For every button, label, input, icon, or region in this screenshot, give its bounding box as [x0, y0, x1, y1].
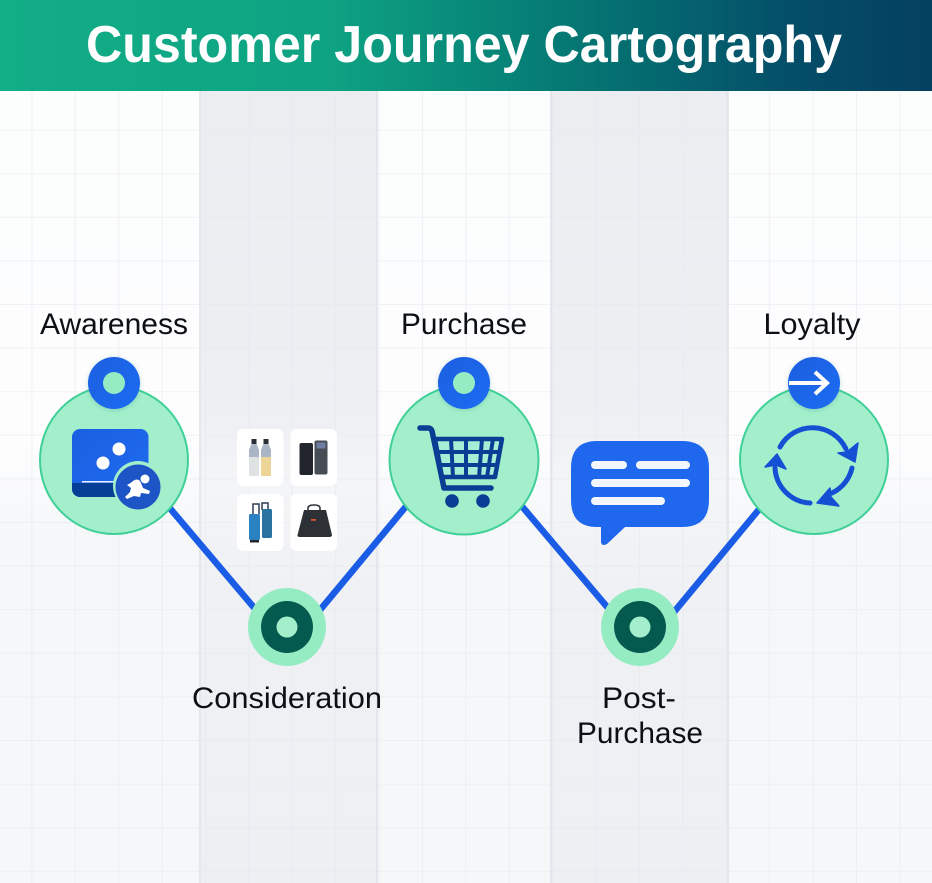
label: Awareness: Awareness — [40, 308, 188, 341]
journey path — [168, 504, 761, 612]
stage: Consideration — [192, 588, 382, 715]
icon: browser screen with runner — [72, 429, 163, 511]
label: Post-Purchase — [577, 682, 703, 750]
label: Consideration: Consideration — [192, 682, 382, 715]
node circle — [740, 386, 888, 534]
thumbnail: black bag — [290, 494, 337, 551]
product thumbnails — [237, 429, 337, 551]
label: Purchase: Purchase — [401, 308, 527, 341]
node circle — [40, 386, 188, 534]
top marker — [438, 357, 490, 409]
thumbnail: dark devices — [290, 429, 337, 486]
label: Post-Purchase: Purchase — [577, 717, 703, 750]
stage: Post-Purchase — [577, 588, 703, 750]
title: Customer Journey Cartography — [86, 16, 842, 74]
top marker — [88, 357, 140, 409]
stage: Loyalty — [740, 308, 888, 534]
node — [601, 588, 679, 666]
label: Post-Purchase: Post- — [602, 682, 676, 715]
title banner — [0, 0, 932, 91]
thumbnail: bottles — [237, 429, 284, 486]
icon: cycle arrows — [765, 428, 858, 506]
node circle — [390, 386, 538, 534]
stage: Awareness — [40, 308, 188, 534]
icon: speech bubble — [571, 441, 709, 545]
icon: shopping cart — [420, 428, 502, 508]
label: Loyalty: Loyalty — [764, 308, 860, 341]
thumbnail: blue luggage — [237, 494, 284, 551]
node — [248, 588, 326, 666]
stage: Purchase — [390, 308, 538, 534]
top marker with arrow — [788, 357, 840, 409]
